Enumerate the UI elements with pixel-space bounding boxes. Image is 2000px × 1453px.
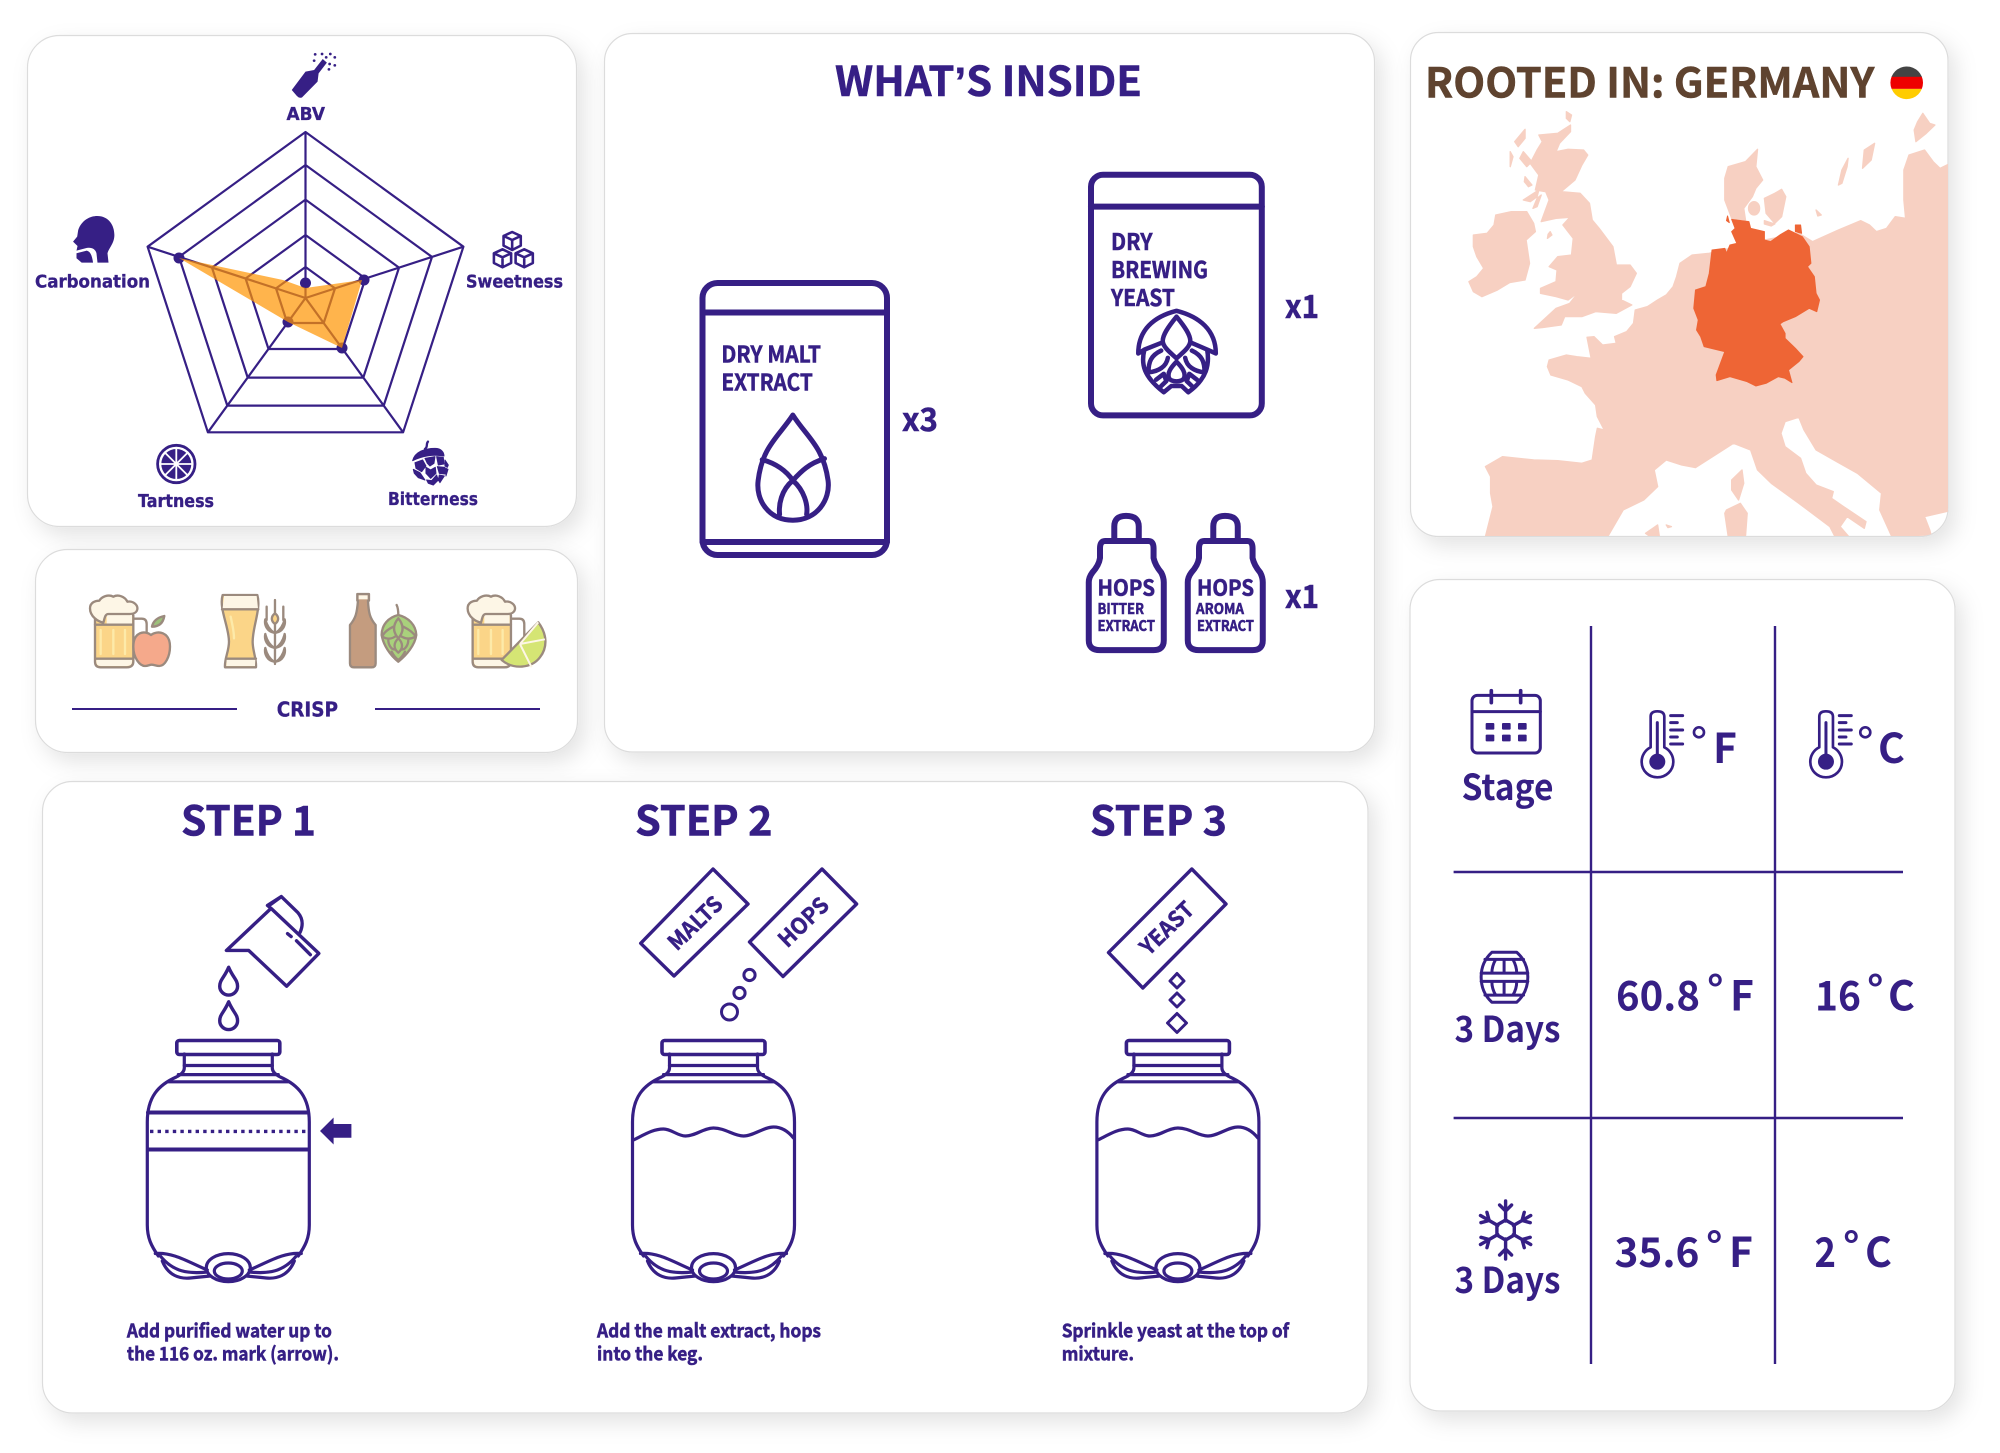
heading: step 2: STEP 2 (635, 788, 772, 848)
icon: beer mug and lime (468, 596, 545, 667)
icon: German flag (1890, 66, 1924, 100)
panel: crisp pairings (36, 550, 578, 752)
label: ABV: ABV (286, 104, 325, 125)
icon: pitcher pouring water (226, 897, 319, 986)
icon: citrus slice (158, 445, 195, 483)
value: 35.6 F: F (1729, 1219, 1753, 1279)
icon: water drops (220, 967, 238, 1030)
divider: right rule (375, 708, 540, 710)
icon: bottle and hop (350, 594, 416, 667)
value: 2 C: C (1865, 1219, 1892, 1279)
icon: malt extract sachet (702, 283, 887, 555)
icon: bottle popping (292, 53, 336, 98)
icon: aroma hops extract bottle: EXTRACT (1197, 615, 1254, 636)
icon: thermometer C (1810, 711, 1870, 777)
icon: bitter hops extract bottle: EXTRACT (1098, 615, 1155, 636)
caption: step 3: Sprinkle yeast at the top of (1062, 1317, 1290, 1344)
icon: bitter hops extract bottle: HOPS (1098, 571, 1155, 602)
illustration: keg with liquid and yeast (1097, 1040, 1259, 1282)
icon: sugar cubes (494, 232, 533, 267)
icon: malts sachet (641, 869, 748, 976)
label: x1 yeast: x1 (1285, 282, 1319, 328)
icon: yeast sachet (1108, 869, 1226, 988)
caption: step 2: Add the malt extract, hops (596, 1317, 821, 1344)
label: Sweetness: Sweetness (466, 271, 563, 292)
icon: yeast sachet (1091, 175, 1262, 415)
icon: aroma hops extract bottle (1188, 516, 1263, 650)
label: x1 hops: x1 (1285, 572, 1319, 618)
header: F: F (1713, 715, 1737, 775)
icon: yeast sachet: DRY (1111, 223, 1153, 257)
value: 60.8 F: ° (1707, 958, 1724, 1018)
panel: flavour radar (28, 36, 576, 526)
label: Bitterness: Bitterness (388, 489, 478, 510)
caption: step 1: the 116 oz. mark (arrow). (127, 1339, 339, 1366)
title: rooted in Germany: ROOTED IN: GERMANY (1425, 50, 1876, 110)
header: C: C (1878, 715, 1905, 775)
icon: pint glass and wheat (222, 595, 285, 667)
icon: hops sachet: HOPS (770, 889, 835, 954)
icon: falling pellets (722, 969, 755, 1020)
icon: yeast sachet: BREWING (1111, 251, 1208, 285)
radar chart (148, 132, 463, 432)
divider: left rule (72, 708, 237, 710)
heading: step 3: STEP 3 (1090, 788, 1227, 848)
icon: beer mug and apple (90, 596, 170, 667)
table grid (1454, 626, 1903, 1364)
caption: step 3 (1062, 1317, 1290, 1366)
label: 3 Days: 3 Days (1454, 1252, 1560, 1304)
icon: hop cone (413, 442, 448, 485)
illustration: keg with liquid (632, 1040, 794, 1282)
label: Tartness: Tartness (138, 491, 214, 512)
icon: thermometer F (1642, 711, 1704, 777)
caption: step 1 (126, 1317, 339, 1366)
icon: malt extract sachet: DRY MALT (721, 336, 821, 370)
value: 2 C: 2 (1814, 1219, 1836, 1279)
panel: fermentation table (1410, 580, 1955, 1411)
heading: step 1: STEP 1 (181, 788, 316, 848)
panel: what's inside (604, 34, 1374, 752)
icon: head and throat (73, 216, 114, 263)
label: x3: x3 (902, 395, 938, 441)
icon: snowflake (1477, 1201, 1534, 1259)
value: 35.6 F: ° (1706, 1214, 1723, 1274)
icon: falling yeast granules (1168, 974, 1186, 1032)
Germany highlighted (1694, 216, 1820, 386)
icon: malts sachet: MALTS (659, 888, 729, 957)
label: Carbonation: Carbonation (35, 271, 150, 292)
icon: yeast sachet: YEAST (1131, 893, 1201, 962)
panel: rooted in Germany (1410, 32, 1950, 538)
value: 35.6 F: 35.6 (1614, 1219, 1700, 1279)
value: 60.8 F: 60.8 (1616, 962, 1700, 1022)
caption: step 2 (596, 1317, 821, 1366)
icon: aroma hops extract bottle: HOPS (1197, 571, 1254, 602)
label: CRISP: CRISP (277, 697, 338, 721)
icon: malt extract sachet: EXTRACT (721, 363, 813, 397)
icon: yeast sachet: YEAST (1110, 279, 1175, 313)
arrow: fill level (320, 1118, 351, 1144)
caption: step 2: into the keg. (597, 1339, 703, 1366)
icon: bitter hops extract bottle: BITTER (1098, 598, 1144, 619)
caption: step 1: Add purified water up to (126, 1317, 332, 1344)
value: 16 C: C (1888, 962, 1915, 1022)
label: 3 Days: 3 Days (1454, 1001, 1560, 1053)
value: 16 C: 16 (1815, 962, 1861, 1022)
map of Western Europe (1469, 112, 1950, 538)
caption: step 3: mixture. (1062, 1339, 1134, 1366)
title: what's inside: WHAT’S INSIDE (835, 48, 1142, 108)
header: Stage: Stage (1462, 759, 1554, 811)
panel: brewing steps (42, 782, 1368, 1413)
icon: calendar (1472, 691, 1540, 753)
value: 16 C: ° (1867, 958, 1884, 1018)
icon: hops sachet (750, 869, 857, 976)
icon: aroma hops extract bottle: AROMA (1195, 598, 1245, 619)
value: 2 C: ° (1843, 1214, 1860, 1274)
illustration: keg with fill mark (147, 1040, 309, 1282)
icon: bitter hops extract bottle (1089, 516, 1164, 650)
value: 60.8 F: F (1730, 962, 1754, 1022)
icon: barrel (1481, 952, 1528, 1002)
